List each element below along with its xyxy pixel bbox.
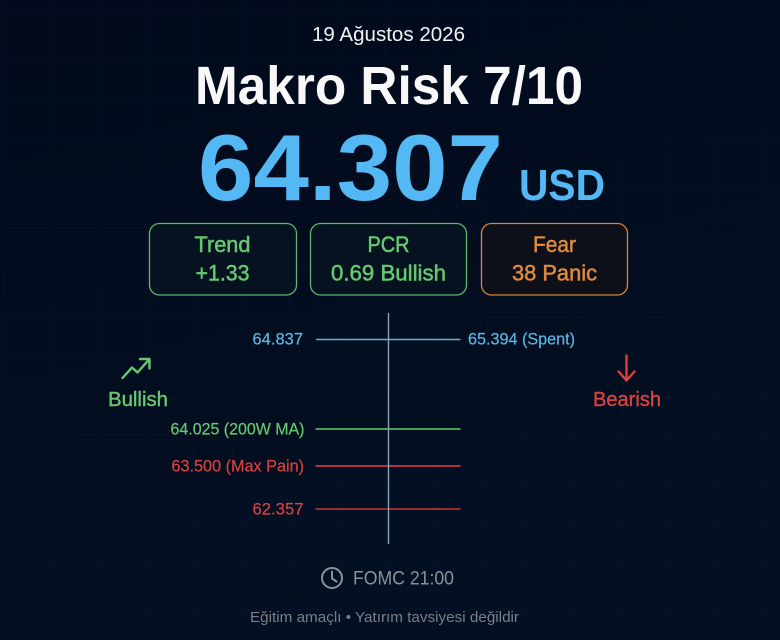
- panel: Trend: Trend: [194, 232, 250, 257]
- panel: PCR: [310, 224, 466, 295]
- date: 19 Ağustos 2026: [312, 24, 465, 46]
- bullish indicator: Bullish: [108, 388, 168, 411]
- bearish indicator: [593, 356, 661, 411]
- vertical axis: [388, 313, 390, 544]
- panel: PCR: 0.69 Bullish: [331, 260, 446, 286]
- panel: PCR: PCR: [368, 232, 410, 257]
- level: 64.837 and 65.394: 65.394 (Spent): [468, 330, 575, 348]
- price: 64.307: [198, 115, 503, 220]
- panel: Fear: [482, 224, 628, 295]
- level: 63.500: 63.500 (Max Pain): [172, 458, 304, 476]
- level: 64.837 and 65.394: 64.837: [252, 330, 303, 348]
- panel: Trend: +1.33: [196, 260, 250, 286]
- level chart: [170, 313, 575, 544]
- level: 64.025: 64.025 (200W MA): [170, 420, 304, 438]
- panel: Fear: Fear: [533, 232, 576, 257]
- title: Makro Risk 7/10: [195, 56, 583, 116]
- event: FOMC: FOMC 21:00: [353, 568, 454, 590]
- panel: Trend: [150, 224, 296, 295]
- disclaimer: Eğitim amaçlı • Yatırım tavsiyesi değildir: [250, 610, 519, 626]
- panel: Fear: 38 Panic: [512, 260, 597, 286]
- icon: trending up arrow: [122, 359, 150, 378]
- level: 64.837 and 65.394: [252, 330, 575, 348]
- level: 62.357: 62.357: [252, 500, 304, 518]
- icon: clock: [322, 568, 342, 588]
- bearish indicator: Bearish: [593, 388, 661, 411]
- icon: down arrow: [618, 356, 634, 380]
- bullish indicator: [108, 359, 168, 411]
- price: USD: [519, 161, 605, 210]
